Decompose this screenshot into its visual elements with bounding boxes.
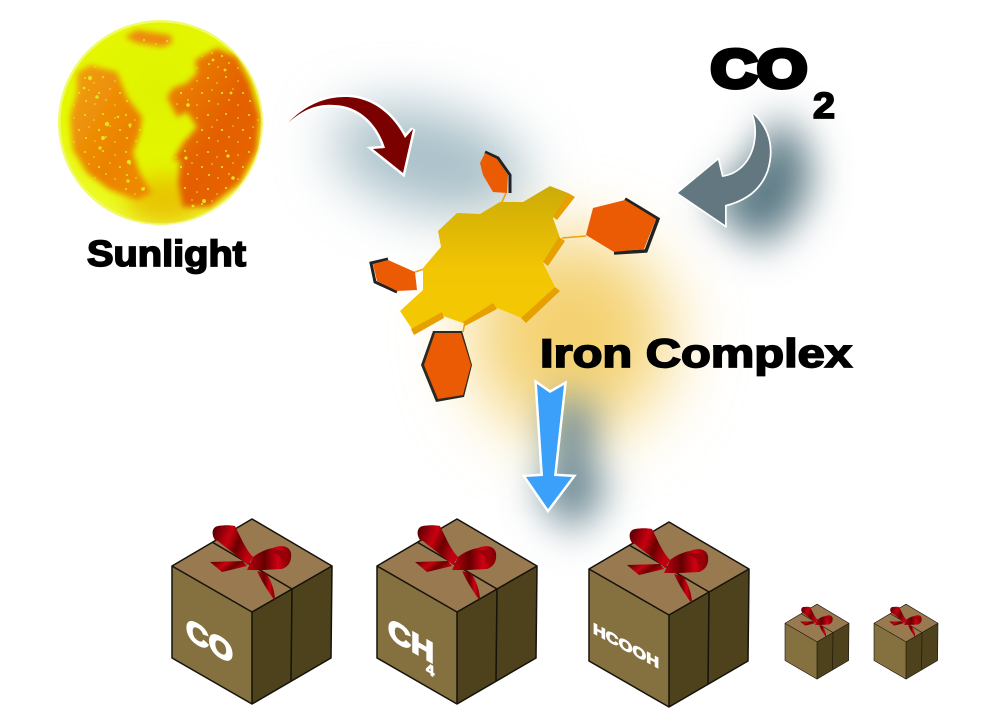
arrow: grey curved arrow from CO2	[678, 114, 770, 225]
arrow: red curved arrow from sun	[288, 97, 413, 173]
gift box: small unlabeled 1	[785, 604, 849, 679]
icon: sun sphere	[58, 20, 264, 226]
molecule core	[400, 186, 568, 329]
hexagon bottom	[421, 331, 472, 402]
molecule side strips	[411, 193, 575, 335]
arrow: blue down arrow	[526, 384, 572, 509]
gift box: HCOOH: HCOOH	[593, 620, 659, 672]
label: Iron Complex: Iron Complex	[540, 332, 852, 376]
icon: iron complex molecule	[371, 152, 658, 402]
gift box: CO: CO	[186, 612, 233, 671]
gift box: small unlabeled 2	[874, 604, 938, 679]
label: CO2: 2	[813, 85, 835, 126]
gift box: CH4: CH	[388, 612, 434, 670]
gift box: CH4	[377, 519, 537, 704]
label: Sunlight: Sunlight	[87, 233, 246, 274]
background glow: red arrow shadow	[321, 87, 539, 233]
connector lines	[415, 193, 586, 332]
hexagon left	[371, 259, 417, 292]
label: CO2	[711, 40, 835, 126]
gift box: HCOOH	[589, 522, 749, 707]
hexagon right	[586, 199, 658, 253]
background glow: iron complex yellow	[470, 235, 670, 435]
background glow: CO2 arrow shadow	[708, 115, 811, 248]
label: CO2: CO	[711, 40, 807, 99]
gift box: CH4: 4	[426, 660, 434, 681]
hexagon top	[480, 152, 510, 193]
background glow: blue arrow shadow	[535, 400, 610, 535]
gift box: CO	[172, 519, 332, 704]
